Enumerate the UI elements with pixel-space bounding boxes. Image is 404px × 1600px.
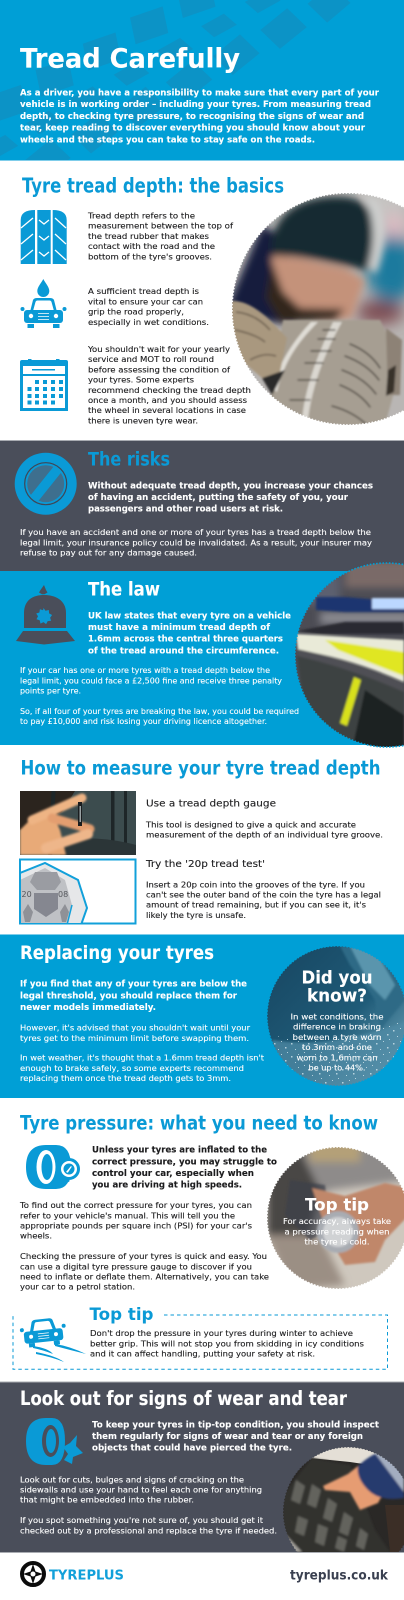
body text: Look out for cuts, bulges and signs of cracking on the [20,1474,244,1484]
body text: legal limit, your insurance policy could be invalidated. As a result, your insurer may [20,537,372,547]
icon: skidding car [19,1317,86,1362]
icon: tread [21,210,67,264]
text: yearly service: the wheel in several locations in case [88,405,246,415]
panel: header [0,0,404,161]
heading: Look out for signs of wear and tear [20,1387,347,1410]
photo: mechanic and tyre [226,190,404,426]
bold text: of having an accident, putting the safety of you, your [88,493,349,503]
callout: did you know: know? [307,987,367,1007]
background tread pattern [0,0,350,160]
photo: tread depth gauge [20,791,136,855]
intro text [20,88,380,145]
text: yearly service: recommend checking the tread depth [88,385,251,395]
text: tread depth refers: measurement between the top of [88,221,234,231]
body text: appropriate pounds per square inch (PSI) for your car's [20,1220,252,1230]
body text: points per tyre. [20,686,81,696]
body text [20,665,299,726]
panel: wear and tear [0,1382,404,1553]
bold text: newer models immediately. [20,1003,156,1013]
icon: tyre with pressure gauge [26,1145,78,1189]
text: sufficient tread depth: A sufficient tread depth is [88,286,199,296]
bold text: UK law states that every tyre on a vehicle [88,611,291,621]
callout: did you know: In wet conditions, the [290,1011,384,1021]
body text [19,1200,269,1292]
text: yearly service: You shouldn't wait for your yearly [87,344,230,354]
callout: did you know: be up to 44%. [308,1063,366,1073]
body text: If you have an accident and one or more of your tyres has a tread depth below the [20,527,371,537]
body text: enough to brake safely, so some experts recommend [20,1063,244,1073]
callout: top tip box [13,1305,388,1369]
text: 20p tread test: Try the '20p tread test' [145,859,265,870]
panel: the risks [0,440,404,571]
callout: did you know: difference in braking [293,1022,381,1032]
body text [20,1022,265,1083]
bold text [20,980,247,1013]
text: sufficient tread depth: especially in wet conditions. [88,317,209,327]
intro text: vehicle is in working order – including your tyres. From measuring tread [20,100,371,110]
text: tread depth refers [87,210,234,261]
callout: top tip circle [265,1140,404,1290]
body text: refuse to pay out for any damage caused. [20,548,197,558]
bold text [92,1420,380,1454]
bold text: Without adequate tread depth, you increase your chances [88,481,373,491]
body text: sidewalls and use your hand to feel each one for anything [20,1484,262,1494]
callout: did you know: worn to 1.6mm can [296,1052,378,1062]
bold text: 1.6mm across the central three quarters [88,635,283,645]
title: Tread Carefully [20,44,240,74]
panel: tyre pressure [13,1111,404,1369]
body text: that might be embedded into the rubber. [20,1495,194,1505]
body text: wheels. [20,1231,52,1241]
callout: top tip box: Don't drop the pressure in your tyres during winter to achieve [90,1328,353,1338]
coin box: 08 [58,890,68,899]
text: 20p tread test: amount of tread remaining, but if you can see it, it's [146,900,366,910]
body text: tyres get to the minimum limit before swapping them. [20,1033,249,1043]
bold text: them regularly for signs of wear and tear or any foreign [92,1432,363,1442]
coin box: 20 [22,890,32,899]
body text: replacing them once the tread depth gets to 3mm. [20,1073,231,1083]
text: yearly service [87,344,251,425]
intro text: As a driver, you have a responsibility to make sure that every part of your [20,88,380,98]
text: tread depth refers: Tread depth refers to the [87,210,195,220]
body text: If you spot something you're not sure of, you should get it [20,1515,264,1525]
bold text: correct pressure, you may struggle to [92,1157,277,1167]
text: sufficient tread depth: grip the road properly, [88,306,184,316]
text: 20p tread test: likely the tyre is unsafe. [146,910,246,920]
text: yearly service: before assessing the condition of [88,364,231,374]
logo: TYREPLUS [49,1567,124,1583]
callout: top tip circle: Top tip [305,1196,369,1216]
bold text: Unless your tyres are inflated to the [92,1146,267,1156]
bold text: control your car, especially when [92,1169,254,1179]
panel: how to measure [20,756,383,925]
bold text: legal threshold, you should replace them for [20,991,238,1001]
bold text: of the tread around the circumference. [88,646,279,656]
heading: Replacing your tyres [20,942,214,964]
bold text [88,611,291,656]
callout: top tip box: Top tip [90,1305,154,1325]
bold text: objects that could have pierced the tyre. [92,1444,292,1454]
heading: The law [88,579,160,600]
text: 20p tread test: can't see the outer band of the coin the tyre has a legal [146,890,381,900]
text: use a tread depth gauge: Use a tread depth gauge [146,799,276,810]
body text: However, it's advised that you shouldn't wait until your [20,1022,251,1032]
callout: did you know: Did you [302,968,372,988]
body text: refer to your vehicle's manual. This will tell you the [20,1210,235,1220]
body text [20,1474,277,1535]
body text: can use a digital tyre pressure gauge to discover if you [20,1261,252,1271]
text: yearly service: your tyres. Some experts [88,375,194,385]
icon: no-entry sign [15,453,77,515]
text: use a tread depth gauge [145,799,383,840]
icon: car with water drop [20,279,66,328]
photo: police car [295,560,404,750]
callout: top tip circle: a pressure reading when [284,1226,390,1236]
text: tread depth refers: the tread rubber that makes [88,231,209,241]
bold text: passengers and other road users at risk. [88,505,283,515]
panel: the law [0,571,404,745]
bold text: must have a minimum tread depth of [88,623,270,633]
text: yearly service: there is uneven tyre wear. [88,415,198,425]
body text: If your car has one or more tyres with a tread depth below the [20,665,270,675]
body text: To find out the correct pressure for your tyres, you can [19,1200,252,1210]
coin box [20,860,136,925]
icon: police helmet [16,585,75,644]
bold text: you are driving at high speeds. [92,1181,242,1191]
callout: top tip box: and it can affect handling, putting your safety at risk. [90,1348,315,1358]
callout: top tip circle: the tyre is cold. [304,1237,370,1247]
text: use a tread depth gauge: measurement of the depth of an individual tyre groove. [146,830,383,840]
body text: to pay £10,000 and risk losing your driving licence altogether. [20,716,267,726]
panel: replacing your tyres [0,934,404,1098]
bold text [88,481,373,515]
photo: finger on tyre [283,1447,404,1552]
body text: need to inflate or deflate them. Alternatively, you can take [20,1272,269,1282]
callout: did you know [267,946,404,1090]
callout: did you know: to 3mm and one [302,1042,372,1052]
icon: calendar [20,359,68,411]
body text [20,527,372,558]
text: tread depth refers: contact with the road and the [88,241,215,251]
body text: In wet weather, it's thought that a 1.6mm tread depth isn't [20,1053,265,1063]
text: 20p tread test: Insert a 20p coin into the grooves of the tyre. If you [146,879,365,889]
text: 20p tread test [145,859,381,920]
intro text: wheels and the steps you can take to stay safe on the roads. [20,135,315,145]
body text: Checking the pressure of your tyres is quick and easy. You [20,1251,267,1261]
text: sufficient tread depth [88,286,209,327]
logo [22,1563,124,1585]
body text: your car to a petrol station. [20,1282,135,1292]
icon: damaged tyre [26,1418,83,1465]
panel: tyre tread depth basics [20,174,404,426]
heading: Tyre tread depth: the basics [22,174,284,198]
text: yearly service: once a month, and you should assess [88,395,247,405]
body text: legal limit, you could face a £2,500 fine and receive three penalty [20,675,282,685]
heading: The risks [88,450,170,471]
text: yearly service: service and MOT to roll round [88,354,214,364]
bold text: To keep your tyres in tip-top condition, you should inspect [92,1420,380,1430]
bold text [92,1146,277,1191]
photo scalloped edge [232,193,404,425]
body text: So, if all four of your tyres are breaking the law, you could be required [20,706,299,716]
intro text: depth, to checking tyre pressure, to recognising the signs of wear and [20,112,364,122]
text: tread depth refers: bottom of the tyre's grooves. [88,251,212,261]
callout: top tip circle: For accuracy, always take [283,1216,391,1226]
footer [22,1563,389,1585]
intro text: tear, keep reading to discover everything you should know about your [20,124,366,134]
body text: checked out by a professional and replace the tyre if needed. [20,1525,277,1535]
text: use a tread depth gauge: This tool is designed to give a quick and accurate [145,819,356,829]
text: sufficient tread depth: vital to ensure your car can [88,296,203,306]
bold text: If you find that any of your tyres are below the [20,980,247,990]
callout: top tip box: better grip. This will not stop you from skidding in icy conditions [90,1338,364,1348]
callout: did you know: between a tyre worn [292,1032,382,1042]
website: tyreplus.co.uk [290,1567,389,1583]
